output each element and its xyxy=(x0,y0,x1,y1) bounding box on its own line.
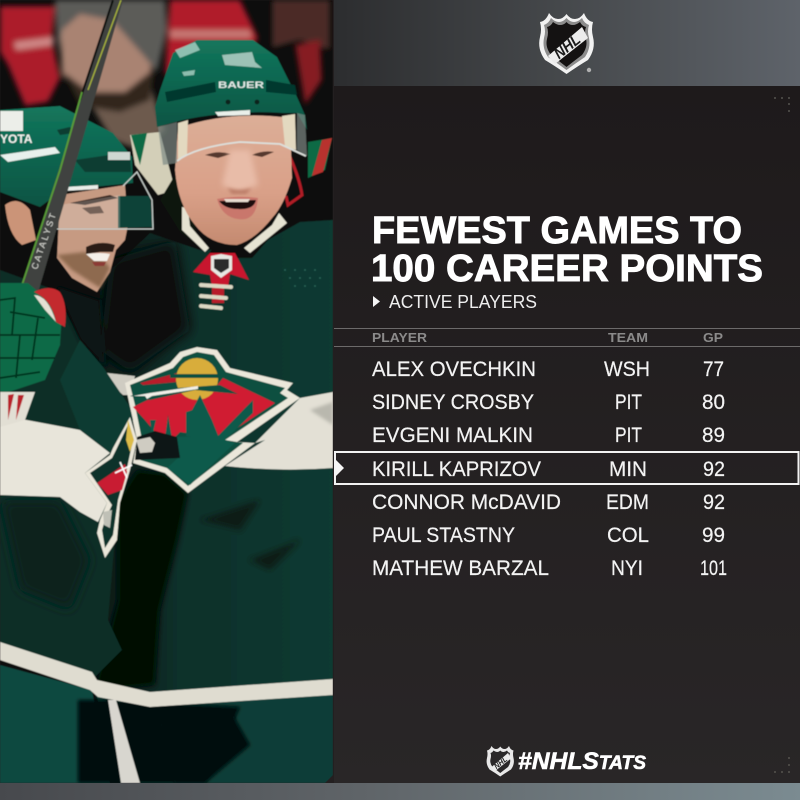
row: Barzal: NYI xyxy=(611,557,643,580)
table header: GP xyxy=(703,330,723,345)
collar xyxy=(160,175,290,258)
hockey stick: CATALYST xyxy=(29,210,59,271)
row: Ovechkin: 77 xyxy=(703,358,724,381)
hair xyxy=(5,200,57,261)
highlight row box: Kaprizov xyxy=(334,452,798,484)
row: Malkin xyxy=(372,424,725,447)
row: Kaprizov xyxy=(372,458,725,481)
table header xyxy=(334,328,800,347)
row: Malkin: PIT xyxy=(615,424,642,447)
jersey stripes xyxy=(0,415,110,522)
row: McDavid: 92 xyxy=(703,491,725,514)
icon: NHL shield logo footer xyxy=(487,746,514,776)
row: Ovechkin: ALEX OVECHKIN xyxy=(372,358,536,381)
title xyxy=(371,210,763,290)
icon: Minnesota Wild crest xyxy=(125,347,300,493)
blurred crowd xyxy=(0,0,330,150)
title: 100 CAREER POINTS xyxy=(371,248,763,290)
header band xyxy=(334,0,800,86)
row: Kaprizov: 92 xyxy=(703,458,725,481)
glove behind right player xyxy=(130,132,175,195)
row: Stastny xyxy=(372,524,725,547)
row: Barzal: 101 xyxy=(700,557,727,580)
row: McDavid xyxy=(372,491,725,514)
helmet brand: BAUER xyxy=(218,80,264,91)
row: Ovechkin xyxy=(372,358,724,381)
table header: PLAYER xyxy=(372,330,428,345)
stick blade xyxy=(108,700,140,783)
hockey stick xyxy=(20,0,123,293)
row: Barzal xyxy=(372,557,727,580)
row: Crosby xyxy=(372,391,725,414)
hashtag #NHLStats: #NHLSTATS xyxy=(518,748,646,775)
row: Kaprizov: KIRILL KAPRIZOV xyxy=(372,458,541,481)
visor strip xyxy=(177,142,306,161)
row: Crosby: SIDNEY CROSBY xyxy=(372,391,534,414)
row: Crosby: 80 xyxy=(702,391,725,414)
row: McDavid: EDM xyxy=(606,491,649,514)
row: Stastny: COL xyxy=(607,524,649,547)
visor xyxy=(118,196,153,228)
collar logo and laces xyxy=(193,253,249,308)
decorative corner dots bottom xyxy=(774,757,790,773)
row: Malkin: 89 xyxy=(702,424,725,447)
icon: NHL shield logo top: NHL xyxy=(551,31,584,63)
icon: crest on left player xyxy=(85,417,137,558)
subtitle: active players: ACTIVE PLAYERS xyxy=(389,291,537,312)
right player helmet xyxy=(155,40,307,165)
title: FEWEST GAMES TO xyxy=(372,210,742,252)
left player jersey xyxy=(0,270,133,783)
row: Barzal: MATHEW BARZAL xyxy=(372,557,549,580)
table header: TEAM xyxy=(608,330,648,345)
right player face xyxy=(175,114,306,245)
row: Malkin: EVGENI MALKIN xyxy=(372,424,533,447)
row: Stastny: 99 xyxy=(702,524,725,547)
row: Stastny: PAUL STASTNY xyxy=(372,524,515,547)
left player head xyxy=(0,106,153,292)
helmet sponsor text: YOTA xyxy=(0,132,33,146)
icon: NHL shield logo footer: NHL xyxy=(492,754,509,771)
row: Crosby: PIT xyxy=(615,391,642,414)
row: McDavid: CONNOR McDAVID xyxy=(372,491,561,514)
helmet xyxy=(0,106,133,207)
glove xyxy=(0,283,66,427)
ear xyxy=(5,201,36,245)
stats panel background xyxy=(334,86,800,783)
photo: two Minnesota Wild players celebrating xyxy=(0,0,333,783)
strap and bow right side xyxy=(286,138,332,205)
row: Ovechkin: WSH xyxy=(604,358,650,381)
icon: NHL shield logo top xyxy=(539,13,594,74)
table rows xyxy=(372,358,727,580)
footer band xyxy=(0,783,800,800)
decorative corner dots top xyxy=(774,97,790,112)
left sleeve covering crest xyxy=(60,340,133,453)
hem stripes xyxy=(0,642,333,707)
row: Kaprizov: MIN xyxy=(609,458,647,481)
right player jersey xyxy=(95,220,333,783)
